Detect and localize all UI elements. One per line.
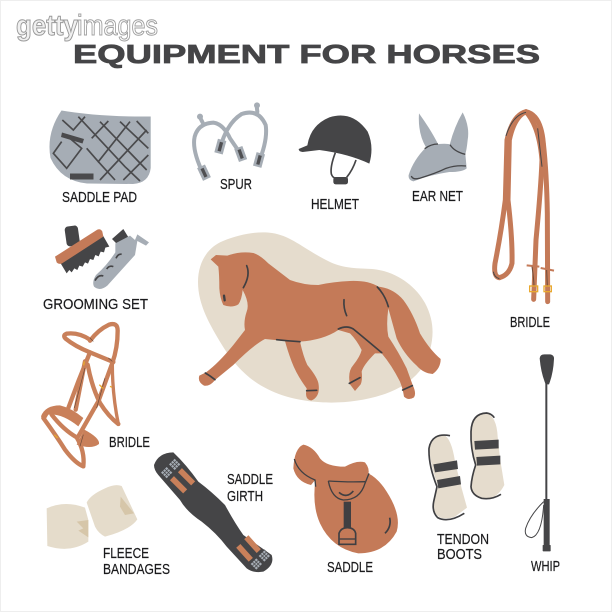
watermark	[16, 10, 158, 42]
icon: helmet	[299, 115, 371, 184]
title: EQUIPMENT FOR HORSES	[73, 39, 540, 69]
icon: whip	[525, 354, 554, 551]
label: ear net: EAR NET	[412, 189, 463, 205]
blob background	[198, 232, 433, 403]
label: saddle girth: GIRTH	[227, 489, 263, 505]
label: spur: SPUR	[220, 177, 252, 193]
icon: reins bridle	[493, 112, 554, 302]
label: reins bridle: BRIDLE	[510, 315, 550, 331]
label: saddle: SADDLE	[327, 560, 373, 576]
label: saddle girth	[227, 472, 273, 505]
icon: grooming set	[55, 225, 149, 289]
watermark: getty	[16, 10, 78, 42]
icon: fleece bandages	[47, 485, 137, 549]
icon: saddle pad	[49, 110, 151, 184]
illustration: horse	[199, 252, 441, 400]
label: head bridle: BRIDLE	[109, 435, 150, 451]
icon: ear net	[409, 112, 468, 181]
label: tendon boots: TENDON	[437, 532, 489, 548]
label: grooming set: GROOMING SET	[43, 297, 148, 313]
label: whip: WHIP	[531, 559, 560, 575]
label: fleece bandages	[103, 546, 170, 578]
icon: saddle girth	[154, 452, 272, 572]
watermark: images	[77, 10, 158, 42]
label: helmet: HELMET	[311, 197, 359, 213]
label: tendon boots	[437, 532, 489, 563]
label: fleece bandages: BANDAGES	[103, 562, 170, 578]
icon: spur	[194, 102, 266, 181]
label: saddle pad: SADDLE PAD	[62, 190, 137, 206]
label: tendon boots: BOOTS	[437, 547, 482, 563]
icon: saddle	[293, 445, 398, 553]
icon: head bridle	[41, 324, 118, 466]
icon: tendon boots	[429, 413, 504, 520]
label: saddle girth: SADDLE	[227, 472, 273, 488]
label: fleece bandages: FLEECE	[103, 546, 149, 562]
